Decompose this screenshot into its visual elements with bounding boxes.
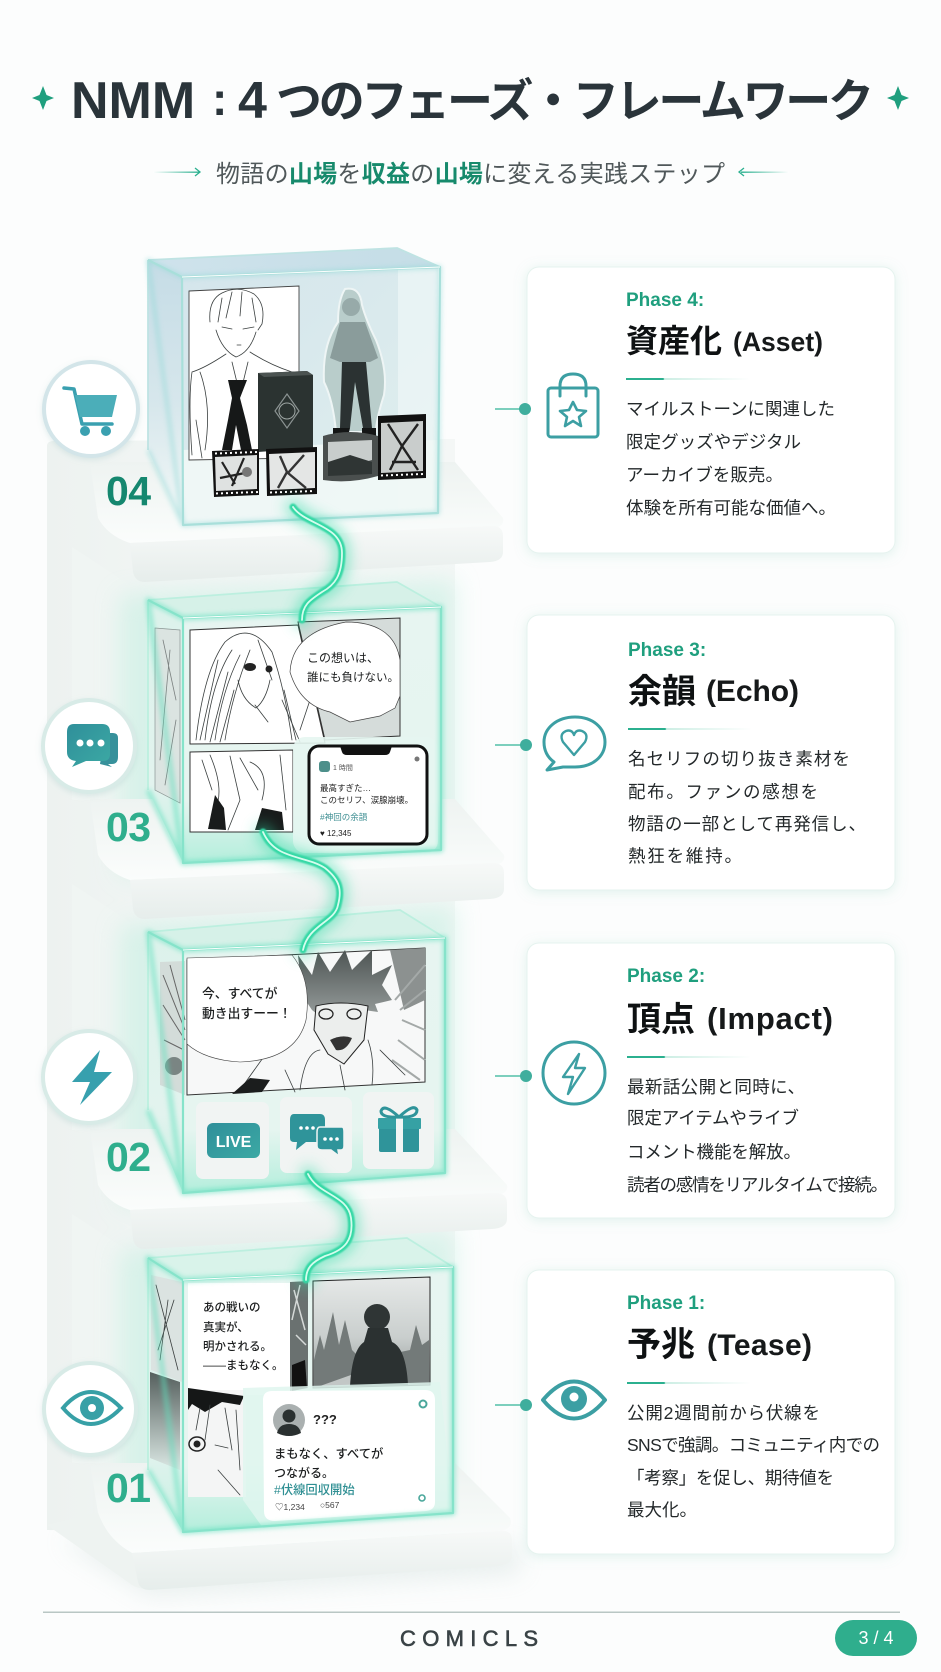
tile: gift (363, 1092, 434, 1169)
panel: Phase 3 echo: 余韻 (628, 673, 696, 711)
title: つのフェーズ・フレームワーク (276, 75, 874, 127)
icon: shopping cart (44, 362, 138, 456)
text panel: あの戦いの (203, 1300, 260, 1314)
shelf 4 (90, 462, 503, 582)
shelf 2 (90, 1129, 507, 1249)
social post card (243, 1382, 453, 1528)
case top and sides (148, 1238, 453, 1532)
social post card: ??? (313, 1412, 337, 1427)
glowing connector between phases (263, 507, 352, 1280)
connector (495, 1070, 532, 1082)
panel: Phase 4 asset: Phase 4: (626, 290, 704, 311)
glass case 1: tease (148, 1238, 453, 1532)
social post card: ○567 (320, 1500, 340, 1510)
phase badge 01: 01 (106, 1465, 151, 1511)
panel: Phase 2 impact (495, 943, 895, 1218)
case rim (148, 1238, 453, 1532)
case rim (148, 910, 445, 1193)
title: : (212, 73, 227, 125)
icon: chat bubbles (43, 700, 135, 792)
shelf tower (47, 439, 520, 1596)
social post card: まもなく、すべてが (274, 1446, 384, 1461)
glass case 2: impact (148, 910, 445, 1193)
page number pill: 3 / 4 (858, 1628, 894, 1648)
panel: Phase 4 asset: マイルストーンに関連した (626, 399, 835, 419)
phase badge 02 (43, 1031, 151, 1180)
phone post: #神回の余韻 (320, 812, 368, 822)
glow: 4 to 3 (293, 507, 342, 620)
title: NMM (71, 72, 195, 130)
icon: right sparkle (887, 86, 909, 110)
dark strip panel (290, 1281, 308, 1391)
panel: Phase 2 impact: 限定アイテムやライブ (627, 1108, 799, 1128)
panel: Phase 2 impact: 頂点 (627, 1001, 695, 1039)
panel: Phase 1 tease: 予兆 (627, 1326, 695, 1364)
panel: Phase 4 asset: (Asset) (733, 327, 823, 357)
glow: 2 to 1 (306, 1174, 352, 1280)
footer (43, 1612, 917, 1656)
manga panel: hero (187, 948, 425, 1095)
social post card: ♡1,234 (275, 1502, 305, 1512)
case top and sides (148, 248, 440, 525)
speech bubble: 動き出すーー！ (202, 1006, 292, 1021)
panel: Phase 4 asset: 限定グッズやデジタル (626, 432, 801, 452)
shelf 3 (90, 799, 504, 919)
case top and sides (148, 910, 445, 1193)
tile: live (196, 1102, 269, 1179)
panel: Phase 3 echo: 名セリフの切り抜き素材を (628, 749, 850, 769)
icon: eye (44, 1363, 136, 1455)
tower column (47, 439, 455, 1535)
base shadow (60, 1540, 520, 1596)
phase badge 03: 03 (106, 804, 151, 850)
panel: Phase 2 impact: Phase 2: (627, 966, 705, 987)
acrylic stand figure (324, 289, 385, 436)
glass case 3: afterglow (148, 582, 441, 863)
phone post: ♥ 12,345 (320, 829, 352, 838)
panel: Phase 2 impact: (Impact) (707, 1001, 833, 1036)
base plinth (47, 1463, 512, 1590)
panel: Phase 1 tease: (Tease) (707, 1329, 812, 1362)
connector (495, 403, 531, 415)
case top and sides (148, 582, 441, 863)
icon: heart speech bubble (544, 717, 605, 770)
icon: left sparkle (32, 86, 54, 110)
panel: Phase 4 asset: 体験を所有可能な価値へ。 (626, 498, 836, 518)
panel with speech bubble: 誰にも負けない。 (307, 670, 399, 684)
panel: Phase 3 echo: (Echo) (706, 675, 799, 708)
text panel: 真実が、 (203, 1320, 249, 1334)
collector box (258, 371, 313, 452)
manga panel: face (188, 1388, 246, 1497)
icon: bolt in circle (543, 1042, 605, 1104)
panel: Phase 2 impact: コメント機能を解放。 (627, 1142, 801, 1162)
text panel: 明かされる。 (203, 1340, 272, 1353)
speech bubble: 今、すべてが (202, 986, 278, 1001)
side strips (150, 1275, 182, 1470)
phase badge 03 (43, 700, 151, 850)
diorama (323, 432, 378, 481)
panel with speech bubble (290, 618, 400, 740)
panel: Phase 1 tease: 「考察」を促し、期待値を (627, 1468, 834, 1488)
panel: Phase 1 tease: SNSで強調。コミュニティ内での (627, 1435, 880, 1455)
title (32, 72, 909, 130)
phase badge 01 (44, 1363, 151, 1511)
side strip (160, 961, 185, 1095)
case rim (148, 248, 440, 525)
glow: 3 to 2 (263, 832, 340, 950)
subtitle: 物語の山場を収益の山場に変える実践ステップ (216, 161, 725, 188)
panel: Phase 3 echo (495, 615, 895, 890)
manga panel: girl (190, 625, 325, 744)
panel: Phase 4 asset: アーカイブを販売。 (626, 465, 783, 485)
panel with speech bubble: この想いは、 (307, 650, 379, 665)
side strip (155, 628, 180, 803)
phase badge 04: 04 (106, 468, 151, 514)
tile: comments (280, 1097, 352, 1173)
icon: eye (543, 1382, 605, 1418)
phase badge 02: 02 (106, 1134, 151, 1180)
panel: Phase 1 tease: Phase 1: (627, 1293, 705, 1314)
brand name: COMICLS (400, 1626, 544, 1651)
text panel (188, 1283, 290, 1395)
panel: Phase 3 echo: Phase 3: (628, 640, 706, 661)
mint glow on column (120, 580, 455, 1540)
panel: Phase 3 echo: 配布。ファンの感想を (628, 782, 818, 802)
phone post: このセリフ、涙腺崩壊。 (320, 795, 413, 805)
glass case 4: merchandise (148, 248, 440, 525)
film cards (212, 414, 426, 497)
tile: live: LIVE (216, 1134, 252, 1151)
panel: Phase 4 asset (495, 267, 895, 553)
icon: lightning bolt (43, 1031, 135, 1123)
icon: shopping bag (548, 374, 598, 437)
text panel: ――まもなく。 (203, 1359, 284, 1372)
phone post (293, 737, 438, 853)
title: 4 (238, 72, 267, 130)
page number pill (835, 1620, 917, 1656)
panel: Phase 3 echo: 物語の一部として再発信し、 (628, 814, 866, 834)
panel: Phase 2 impact: 最新話公開と同時に、 (627, 1077, 805, 1097)
panel: Phase 2 impact: 読者の感情をリアルタイムで接続。 (627, 1175, 888, 1195)
speech bubble (187, 955, 307, 1062)
manga poster (189, 286, 299, 460)
panel: Phase 1 tease (495, 1270, 895, 1554)
social post card: つながる。 (274, 1465, 334, 1480)
panel: Phase 4 asset: 資産化 (626, 323, 722, 359)
social post card: #伏線回収開始 (274, 1482, 355, 1497)
phone post: 1 時間 (333, 764, 353, 772)
panel: Phase 1 tease: 最大化。 (627, 1500, 697, 1520)
phase badge 04 (44, 362, 151, 514)
manga panel: lower (190, 750, 293, 832)
phone post: 最高すぎた… (320, 783, 371, 793)
landscape panel with silhouette (313, 1277, 430, 1388)
case rim (148, 582, 441, 863)
connector (495, 739, 532, 751)
connector (495, 1399, 532, 1411)
panel: Phase 1 tease: 公開2週間前から伏線を (627, 1403, 820, 1423)
panel: Phase 3 echo: 熱狂を維持。 (628, 846, 742, 866)
